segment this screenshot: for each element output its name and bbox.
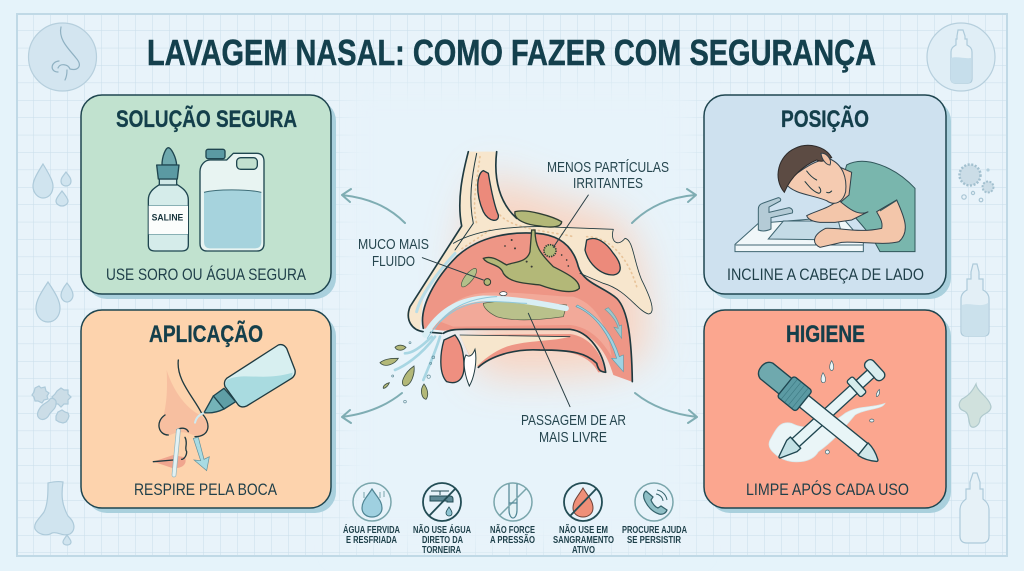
icon: bottle right	[961, 264, 989, 336]
chart: nasal anatomy cross-section	[358, 152, 669, 446]
tip: seek help: PROCURE AJUDA	[622, 525, 687, 536]
icon: water drops lower	[36, 282, 73, 322]
tip: no tap water	[413, 483, 471, 556]
icon: mucus splat	[959, 384, 991, 427]
arrow: to solução segura	[342, 189, 405, 223]
icon: saline bottle and water jug: SALINE	[152, 213, 183, 223]
panel: higiene	[704, 310, 951, 513]
icon: crossed droppers	[753, 356, 887, 471]
heading: POSIÇÃO	[781, 105, 869, 133]
arrow: to aplicação	[342, 393, 402, 423]
icon: nose in circle	[28, 23, 96, 91]
label: menos partículas: IRRITANTES	[573, 175, 643, 192]
label: menos partículas: MENOS PARTÍCULAS	[547, 159, 669, 176]
tip: do not force pressure: A PRESSÃO	[490, 533, 535, 546]
panel: aplicação	[81, 310, 336, 513]
icon: germs right	[960, 164, 994, 202]
tip: boiled and cooled water: E RESFRIADA	[346, 535, 397, 546]
decorative icons: left column	[28, 23, 96, 545]
decorative icons: right column	[927, 23, 995, 543]
icon: germs	[32, 386, 71, 423]
label: muco mais fluido: FLUIDO	[372, 253, 415, 270]
tip: no tap water: DIRETO DA	[422, 535, 463, 546]
arrow: to higiene	[635, 393, 697, 423]
tip: boiled and cooled water	[343, 483, 400, 546]
anatomy drawing	[380, 152, 652, 407]
label: passagem de ar: PASSAGEM DE AR	[521, 412, 626, 429]
tip: seek help: SE PERSISTIR	[627, 535, 682, 546]
icon: nose front view	[35, 482, 74, 545]
heading: SOLUÇÃO SEGURA	[116, 105, 297, 133]
icon: empty bottle	[960, 473, 989, 543]
icon: bottle in circle	[927, 23, 995, 91]
tip: seek help	[622, 483, 687, 546]
heading: HIGIENE	[786, 321, 865, 348]
tip: no active bleeding: SANGRAMENTO	[553, 535, 614, 546]
icon: water drops	[33, 164, 71, 206]
tip: boiled and cooled water: ÁGUA FERVIDA	[343, 523, 400, 536]
label: passagem de ar: MAIS LIVRE	[539, 429, 607, 446]
icon: man leaning over sink	[735, 145, 915, 252]
panel: solução segura	[81, 95, 336, 299]
peach tissue glow	[462, 170, 648, 377]
label: menos partículas	[547, 159, 669, 192]
tip: no tap water: NÃO USE ÁGUA	[413, 523, 471, 536]
icon: saline bottle and water jug	[148, 148, 264, 251]
label: muco mais fluido	[358, 236, 429, 270]
caption: RESPIRE PELA BOCA	[134, 480, 278, 499]
tip: no active bleeding: NÃO USE EM	[559, 523, 608, 536]
safety tips row	[343, 483, 687, 556]
tip: no active bleeding	[553, 483, 614, 556]
tip: no tap water: TORNEIRA	[422, 545, 461, 556]
label leader lines	[422, 195, 588, 407]
tip: do not force pressure: NÃO FORCE	[490, 523, 535, 536]
caption: LIMPE APÓS CADA USO	[746, 480, 909, 499]
caption: INCLINE A CABEÇA DE LADO	[727, 265, 924, 284]
tip: do not force pressure	[490, 483, 535, 546]
heading: APLICAÇÃO	[149, 320, 263, 348]
caption: USE SORO OU ÁGUA SEGURA	[106, 265, 307, 284]
panel: posição	[704, 95, 951, 299]
icon: nose with squeeze bottle	[153, 345, 295, 475]
label: passagem de ar	[521, 412, 626, 446]
arrow: to posição	[632, 189, 696, 223]
tip: no active bleeding: ATIVO	[572, 545, 595, 556]
label: muco mais fluido: MUCO MAIS	[358, 236, 429, 253]
